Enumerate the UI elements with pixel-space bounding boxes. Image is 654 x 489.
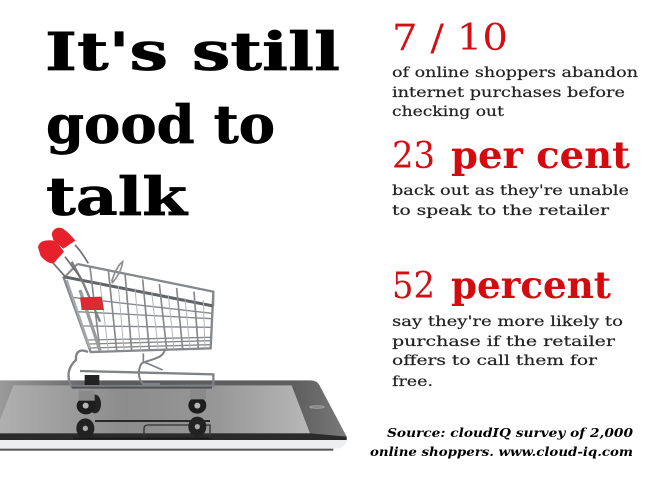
title: good to	[46, 95, 275, 156]
cart basket	[53, 245, 213, 352]
title	[45, 22, 340, 228]
cart wheels	[77, 375, 206, 414]
stat: 23 per cent: per cent	[451, 133, 630, 177]
stat: 7 out of 10: 7 / 10	[392, 18, 508, 59]
stat: 52 percent: purchase if the retailer	[392, 334, 615, 350]
stat: 23 per cent	[392, 133, 630, 219]
stat: 52 percent	[392, 263, 623, 390]
title: It's still	[45, 22, 340, 83]
stat: 7 out of 10: checking out	[392, 104, 504, 120]
source note: online shoppers. www.cloud-iq.com	[370, 444, 633, 459]
stat: 52 percent: percent	[451, 263, 611, 307]
source note: Source: cloudIQ survey of 2,000	[387, 425, 633, 440]
stat: 23 per cent: back out as they're unable	[392, 183, 629, 199]
stat: 52 percent: 52	[392, 266, 435, 307]
stat: 52 percent: free.	[392, 374, 433, 390]
stat: 23 per cent: 23	[392, 136, 435, 177]
source note	[370, 425, 633, 459]
stat: 52 percent: offers to call them for	[392, 353, 597, 369]
illustration: shopping cart on tablet	[0, 228, 347, 451]
tablet	[0, 380, 347, 451]
stat: 7 out of 10: internet purchases before	[392, 85, 625, 101]
title: talk	[46, 167, 188, 228]
cart reflection	[73, 417, 212, 438]
stat: 7 out of 10: of online shoppers abandon	[392, 65, 638, 81]
stat: 52 percent: say they're more likely to	[392, 314, 623, 330]
stat: 7 out of 10	[392, 18, 638, 120]
cart undercarriage	[69, 349, 213, 388]
red handles and seat	[38, 228, 104, 310]
stat: 23 per cent: to speak to the retailer	[392, 203, 609, 219]
